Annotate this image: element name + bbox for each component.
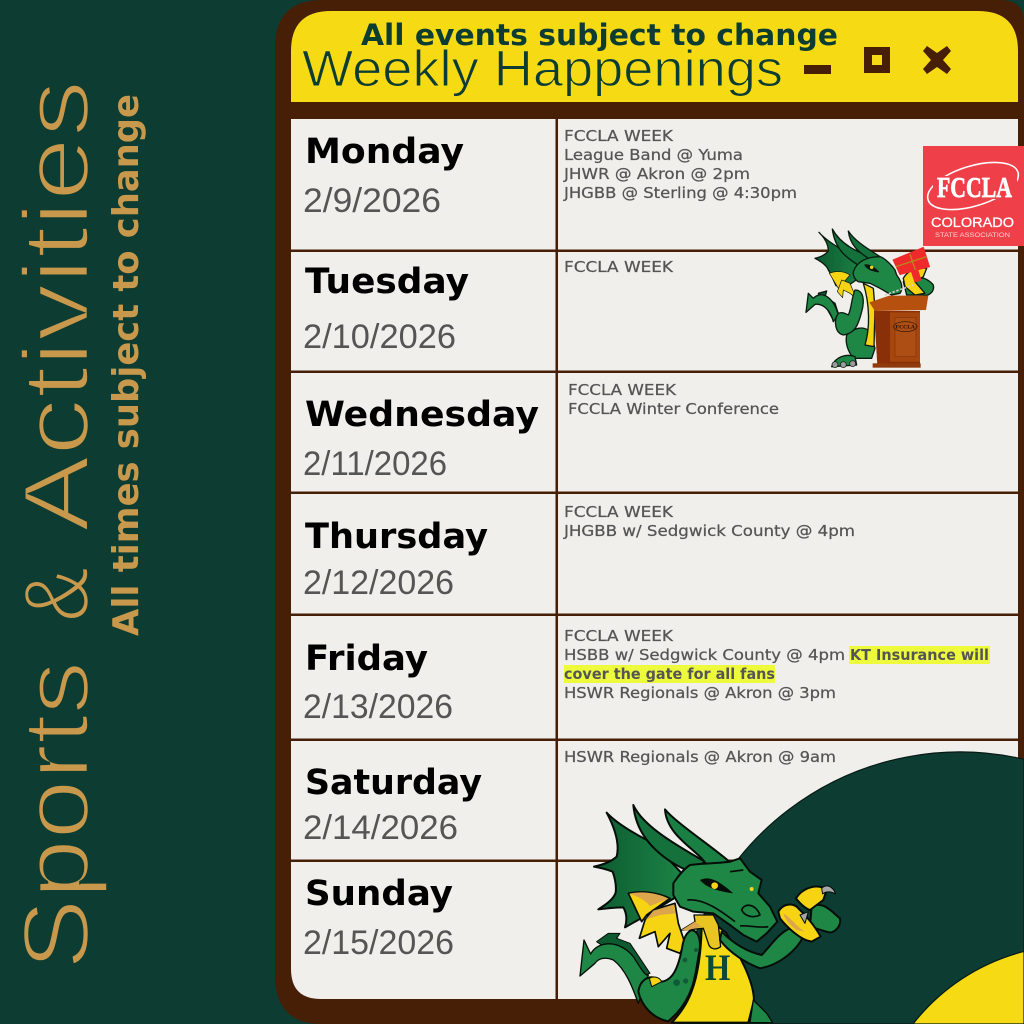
row: Friday: 2/13/2026 [303,688,453,726]
window frame [275,0,1024,1024]
row: Wednesday [303,381,779,483]
dragon right arm [720,928,803,968]
dark green circle [677,752,1024,1024]
row: Wednesday: FCCLA Winter Conference [568,400,779,418]
row: Monday: Monday [305,132,464,172]
schedule cells [291,119,1018,999]
row: Friday: FCCLA WEEK [564,627,674,645]
row: Sunday [303,874,454,962]
dragon fist [778,886,840,942]
row: Monday: 2/9/2026 [303,182,441,220]
row: Friday [303,627,990,726]
row: Saturday: 2/14/2026 [303,809,458,847]
row: Saturday: Saturday [305,763,482,803]
dragon lower tail [750,1000,773,1023]
row: Wednesday: Wednesday [305,395,539,435]
row: Friday: HSWR Regionals @ Akron @ 3pm [564,684,836,702]
vertical subtitle: all times subject to change: All times subject to change [106,94,147,636]
icon: close [923,46,951,74]
dragon horns [633,805,729,872]
row: Friday: Friday [305,639,428,679]
row: Sunday: Sunday [305,874,453,914]
row: Tuesday: FCCLA WEEK [564,258,674,276]
vertical title: Sports & Activities: Activities [4,80,108,532]
row: Monday: League Band @ Yuma [564,146,743,164]
dragon wing [594,813,683,927]
row: Saturday [303,748,836,847]
row: Friday: cover the gate for all fans [564,665,775,683]
row: Thursday: Thursday [305,517,488,557]
dragon eyes [700,878,754,893]
row: Tuesday [303,258,674,356]
row: Friday: HSBB w/ Sedgwick County @ 4pm [564,646,845,664]
dragon jersey [672,927,754,1023]
row: Tuesday: Tuesday [305,262,469,302]
header title: Weekly Happenings [302,40,783,97]
row: Friday: KT Insurance will [850,646,989,664]
row: Thursday: 2/12/2026 [303,564,454,602]
header bar [291,11,1018,102]
row: Wednesday: 2/11/2026 [303,445,447,483]
header note: All events subject to change [361,18,838,52]
icon: minimize [804,65,831,74]
row: Monday: JHGBB @ Sterling @ 4:30pm [563,184,797,202]
row: Thursday: FCCLA WEEK [564,503,674,521]
row: Tuesday: 2/10/2026 [303,318,456,356]
row: Sunday: 2/15/2026 [303,924,454,962]
row: Wednesday: FCCLA WEEK [568,381,677,399]
dragon left arm [638,930,700,1021]
icon: maximize [864,47,890,73]
vertical title: Sports & Activities: & [4,567,108,622]
row: Monday [303,127,797,220]
yellow circle [913,951,1024,1024]
badge: FCCLA Colorado: COLORADO [931,214,1014,230]
row: Monday: JHWR @ Akron @ 2pm [563,165,750,183]
dragon collar [682,915,721,949]
badge: FCCLA Colorado [922,146,1024,246]
dragon snout lines [687,870,768,927]
row: Monday: FCCLA WEEK [564,127,674,145]
row: Thursday: JHGBB w/ Sedgwick County @ 4pm [563,522,855,540]
dragon head [673,858,777,942]
dragon tail [580,933,650,1003]
dragon wing membrane [628,892,685,953]
mascot: dragon at podium [806,229,934,368]
jersey letter: H [705,948,730,989]
row: Saturday: HSWR Regionals @ Akron @ 9am [564,748,836,766]
row: Thursday [303,503,855,602]
mascot: dragon at podium: FCCLA [896,325,916,331]
badge: FCCLA Colorado: STATE ASSOCIATION [935,232,1010,239]
vertical title: Sports & Activities [4,80,108,970]
mascot: dragon in jersey [580,805,840,1023]
vertical title: Sports & Activities: Sports [4,661,108,970]
